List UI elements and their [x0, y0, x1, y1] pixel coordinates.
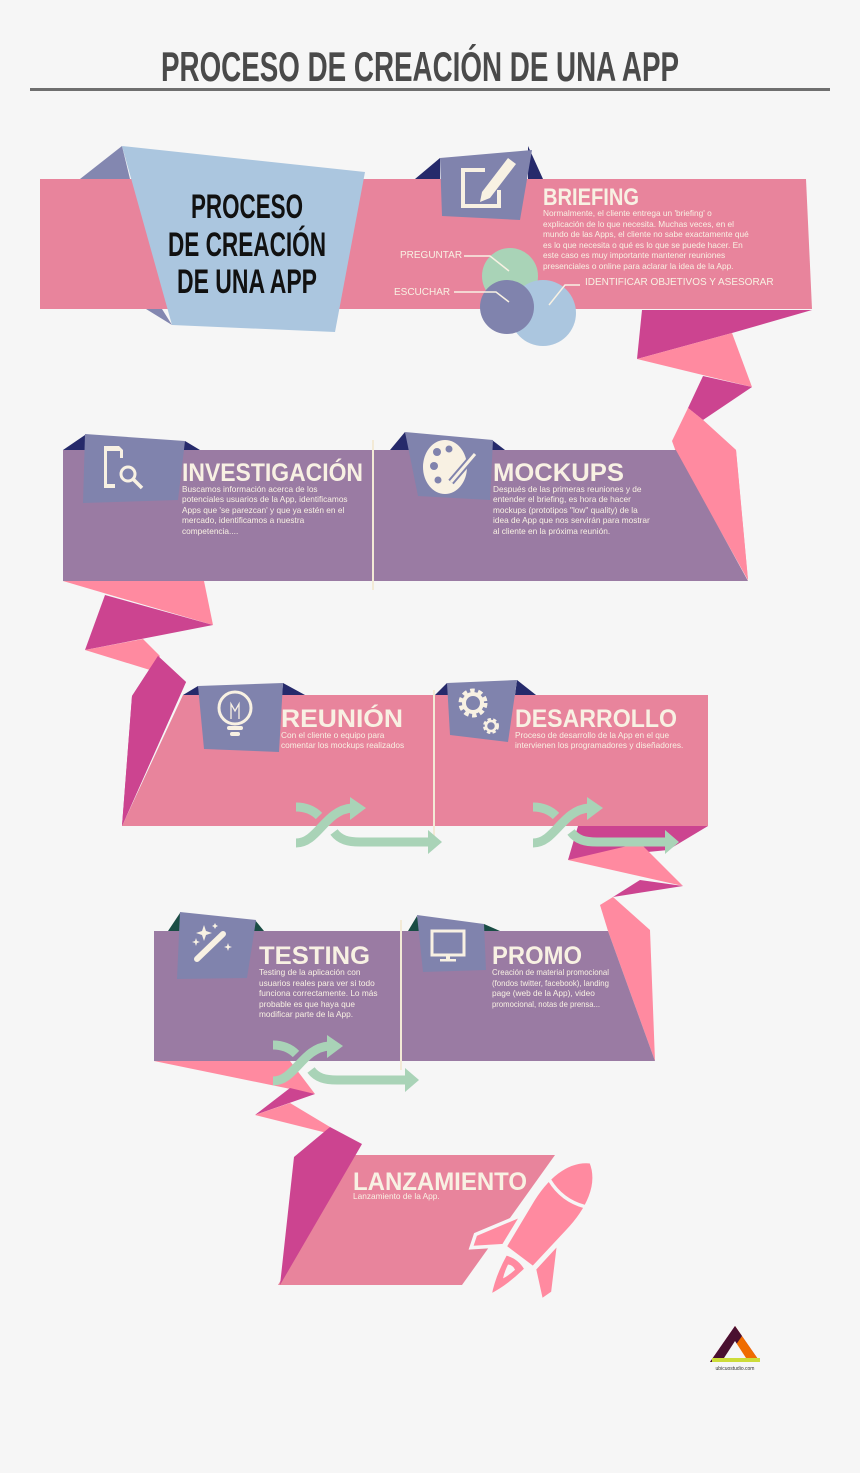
heading: reunion: REUNIÓN	[281, 703, 403, 733]
text: promo: page (web de la App), video	[492, 988, 595, 998]
ribbon connector 3	[568, 826, 708, 1061]
heading: testing: TESTING	[259, 942, 370, 970]
heading: desarrollo: DESARROLLO	[515, 705, 677, 733]
blue title card: PROCESO	[191, 188, 303, 226]
text: briefing description: mundo de las Apps, el cliente no sabe exactamente qué	[543, 229, 749, 239]
arrow: shuffle reunion	[296, 797, 442, 854]
icon: testing magic wand	[168, 912, 264, 979]
text: investigacion	[182, 484, 348, 536]
icon: promo monitor	[408, 915, 500, 972]
text: reunion	[281, 730, 404, 750]
arrow: shuffle desarrollo	[533, 797, 679, 854]
heading: investigacion: INVESTIGACIÓN	[182, 457, 363, 487]
text: mockups: entender el briefing, es hora de hacer	[493, 494, 631, 504]
heading: promo: PROMO	[492, 942, 582, 970]
text: testing: probable es que haya que	[259, 999, 355, 1009]
text: briefing description: Normalmente, el cliente entrega un 'briefing' o	[543, 208, 712, 218]
text: desarrollo: intervienen los programadores y diseñadores.	[515, 740, 683, 750]
text: mockups: al cliente en la próxima reunión.	[493, 526, 610, 536]
blue title card: DE UNA APP	[177, 263, 317, 301]
icon: reunion lightbulb	[183, 683, 305, 752]
logo: ubicuostudio	[710, 1326, 760, 1372]
panel: testing / promo row	[154, 912, 655, 1070]
panel: lanzamiento	[278, 1127, 555, 1285]
text: desarrollo	[515, 730, 683, 750]
icon: rocket	[452, 1133, 630, 1324]
text: promo: Creación de material promocional	[492, 967, 609, 977]
icon: investigacion magnifier doc	[63, 434, 200, 503]
venn diagram: ESCUCHAR	[394, 287, 450, 298]
heading: lanzamiento: LANZAMIENTO	[353, 1168, 527, 1196]
text: promo	[492, 967, 609, 1009]
text: briefing description: explicación de lo que necesita. Muchas veces, en el	[543, 219, 734, 229]
text: briefing description: es lo que necesita o qué es lo que se puede hacer. En	[543, 240, 743, 250]
ribbon connector 2	[63, 581, 213, 826]
text: investigacion: Apps que 'se parezcan' y que ya estén en el	[182, 505, 344, 515]
arrow: shuffle testing	[273, 1035, 419, 1092]
text: mockups: Después de las primeras reuniones y de	[493, 484, 642, 494]
icon: mockups palette	[390, 432, 505, 500]
text: investigacion: mercado, identificamos a nuestra	[182, 515, 305, 525]
text: desarrollo: Proceso de desarrollo de la App en el que	[515, 730, 669, 740]
ribbon connector 1	[637, 310, 812, 580]
blue title card: DE CREACIÓN	[168, 226, 326, 264]
heading: mockups: MOCKUPS	[493, 459, 624, 487]
text: investigacion: potenciales usuarios de la App, identificamos	[182, 494, 348, 504]
text: reunion: comentar los mockups realizados	[281, 740, 404, 750]
panel: reunion / desarrollo row	[122, 656, 708, 840]
venn diagram: PREGUNTAR	[400, 250, 462, 261]
venn diagram: IDENTIFICAR OBJETIVOS Y ASESORAR	[585, 277, 774, 288]
text: mockups: idea de App que nos servirán para mostrar	[493, 515, 650, 525]
panel: investigacion / mockups row	[63, 408, 748, 590]
heading: briefing: BRIEFING	[543, 184, 639, 211]
logo: ubicuostudio: ubicuostudio.com	[716, 1366, 754, 1372]
venn diagram	[394, 248, 774, 346]
text: testing	[259, 967, 378, 1019]
text: promo: promocional, notas de prensa...	[492, 999, 600, 1009]
text: investigacion: Buscamos información acerca de los	[182, 484, 318, 494]
icon: desarrollo gears	[435, 680, 536, 742]
text: briefing description: este caso es muy importante mantener reuniones	[543, 250, 725, 260]
text: briefing description	[543, 208, 749, 271]
panel: briefing banner	[40, 146, 812, 346]
text: mockups	[493, 484, 650, 536]
text: mockups: mockups (prototipos "low" quality) de la	[493, 505, 638, 515]
text: testing: Testing de la aplicación con	[259, 967, 361, 977]
text: testing: funciona correctamente. Lo más	[259, 988, 378, 998]
blue title card	[122, 146, 365, 332]
text: testing: usuarios reales para ver si todo	[259, 978, 375, 988]
text: reunion: Con el cliente o equipo para	[281, 730, 385, 740]
text: briefing description: presenciales o online para aclarar la idea de la App.	[543, 261, 734, 271]
text: promo: (fondos twitter, facebook), landing	[492, 978, 609, 988]
ribbon connector 4	[154, 1061, 330, 1133]
text: testing: modificar parte de la App.	[259, 1009, 353, 1019]
icon: briefing document pencil	[415, 146, 543, 220]
text: lanzamiento: Lanzamiento de la App.	[353, 1191, 440, 1201]
text: investigacion: competencia....	[182, 526, 238, 536]
